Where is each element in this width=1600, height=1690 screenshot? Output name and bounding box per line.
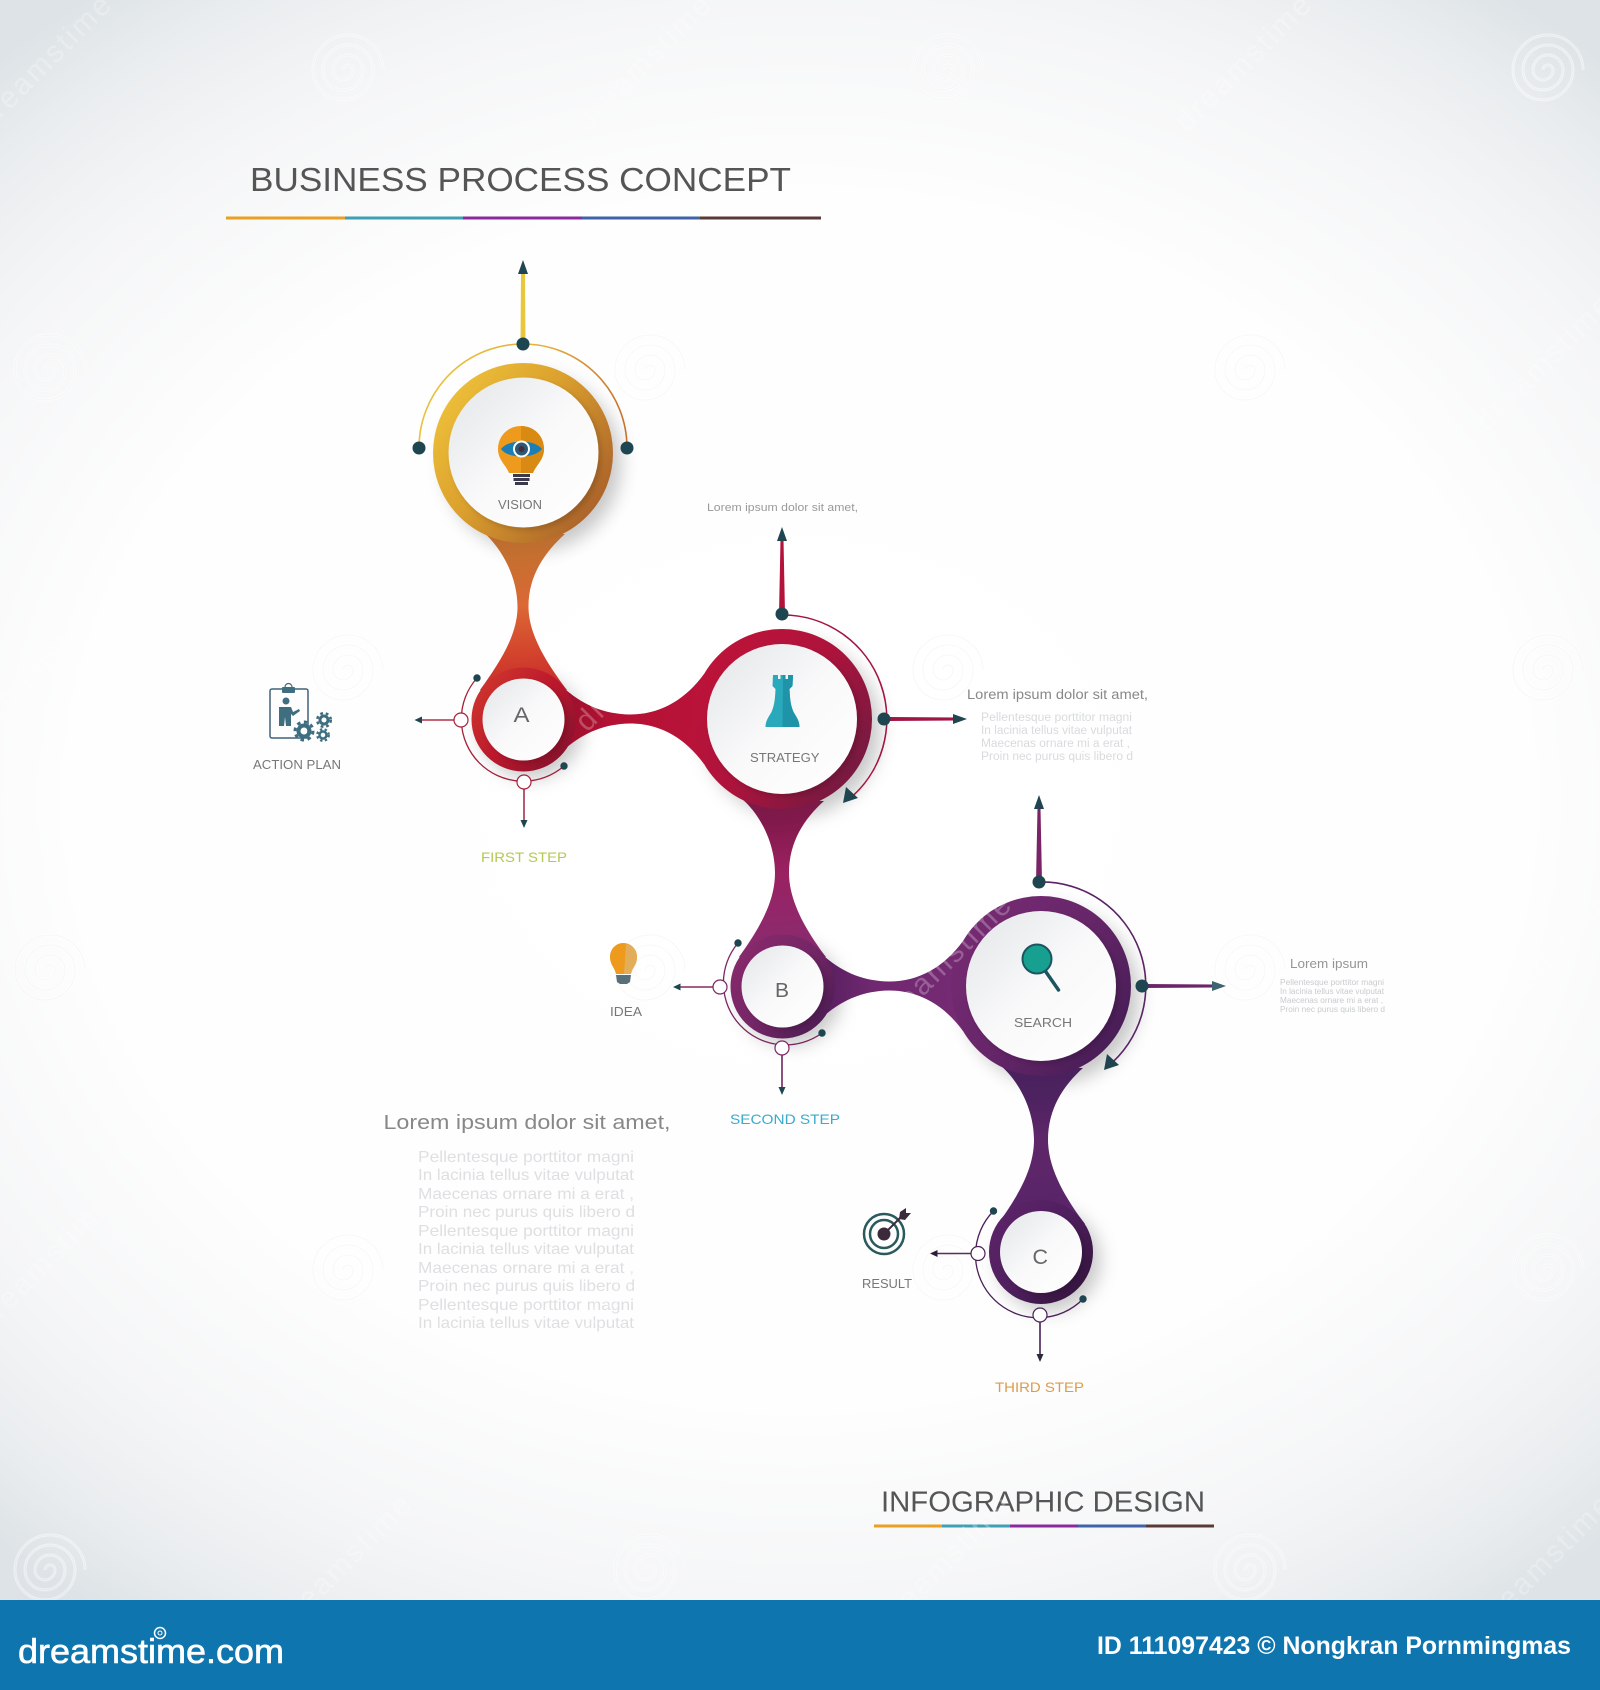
text: strategy top caption: Lorem ipsum dolor sit amet, [707,502,858,514]
ring strategy [692,629,872,809]
text block: strategy right: Pellentesque porttitor magni [981,712,1132,724]
text block: main lorem: Proin nec purus quis libero d [418,1278,635,1295]
label: C: C [1032,1246,1048,1269]
title: BUSINESS PROCESS CONCEPT [250,161,791,198]
text block: search right: Maecenas ornare mi a erat , [1280,996,1383,1005]
label: A: A [514,704,530,727]
icon: idea bulb [610,943,637,984]
ring A [472,668,576,772]
C arc and arrows [930,1207,1087,1362]
ring B [730,934,834,1038]
A arc and arrows [414,674,568,828]
footer credit: ID 111097423 © Nongkran Pornmingmas [1097,1632,1571,1660]
label: third step: THIRD STEP [995,1379,1084,1395]
ring vision [433,363,613,543]
footer band [0,1600,1600,1690]
watermark text: dreamstime [869,889,1018,1038]
text block: search right: Pellentesque porttitor magni [1280,978,1384,987]
text block: search right: In lacinia tellus vitae vulputat [1280,987,1385,996]
text block: search right: Proin nec purus quis libero d [1280,1005,1385,1014]
connector A to strategy [566,674,704,764]
white discs [448,378,1116,1293]
label: B: B [775,980,789,1002]
footer heading colour bar [874,1524,1214,1528]
text block: main lorem: Lorem ipsum dolor sit amet, [384,1112,670,1134]
strategy arc and arrows [776,527,967,803]
icon: action plan [270,684,331,741]
text block: main lorem: In lacinia tellus vitae vulputat [418,1167,635,1184]
watermark text: dreamstime [869,1489,1018,1638]
label: search: SEARCH [1014,1015,1072,1030]
text block: strategy right: Proin nec purus quis libero d [981,751,1133,763]
text block: strategy right: Lorem ipsum dolor sit amet, [967,687,1148,702]
text block: search right: Lorem ipsum [1290,956,1368,971]
search arc and arrows [1032,795,1226,1070]
label: second step: SECOND STEP [730,1111,840,1127]
text block: main lorem: Maecenas ornare mi a erat , [418,1260,634,1277]
watermark text: dreamstime [569,589,718,738]
text block: strategy right: In lacinia tellus vitae vulputat [981,725,1133,737]
label: strategy: STRATEGY [750,750,820,765]
text block: strategy right: Maecenas ornare mi a erat , [981,738,1130,750]
text block: main lorem: Proin nec purus quis libero d [418,1204,635,1221]
text block: strategy right [967,687,1148,763]
icon: chess rook [766,675,800,727]
ring C [989,1200,1093,1304]
watermark text: dreamstime [269,1489,418,1638]
label: idea: IDEA [610,1005,643,1019]
footer logo: dreamstime.com [18,1633,284,1671]
text block: main lorem: Pellentesque porttitor magni [418,1297,634,1314]
text block: main lorem: Maecenas ornare mi a erat , [418,1186,634,1203]
text block: main lorem: Pellentesque porttitor magni [418,1223,634,1240]
icon: magnifier [1022,944,1058,990]
watermark text: dreamstime [1169,1189,1318,1338]
ring search [951,896,1131,1076]
connector strategy to B [739,798,826,957]
label: action plan: ACTION PLAN [253,758,341,772]
text block: main lorem [384,1112,670,1332]
footer heading: INFOGRAPHIC DESIGN [881,1486,1205,1518]
text block: search right [1280,956,1385,1014]
watermark text: dreamstime [869,289,1018,438]
vision arc and arrow [412,260,634,454]
text block: main lorem: Pellentesque porttitor magni [418,1149,634,1166]
watermark text: dreamstime [269,289,418,438]
icon: target [864,1208,911,1254]
watermark text: dreamstime [1169,589,1318,738]
connector vision to A [480,531,567,690]
label: result: RESULT [862,1277,912,1291]
text block: main lorem: In lacinia tellus vitae vulputat [418,1241,635,1258]
soft shadows under process shape [445,375,1139,1311]
text block: main lorem: In lacinia tellus vitae vulputat [418,1315,635,1332]
label: vision: VISION [498,497,542,512]
label: first step: FIRST STEP [481,849,567,865]
icon: lightbulb with eye [498,426,544,485]
connector search to C [998,1065,1085,1224]
title [226,161,821,220]
B arc and arrows [673,939,826,1095]
title colour bar [226,216,821,220]
watermark text: dreamstime [569,1189,718,1338]
process shape: connected rings [433,363,1131,1304]
watermark text: dreamstime [269,889,418,1038]
connector B to search [825,941,963,1031]
